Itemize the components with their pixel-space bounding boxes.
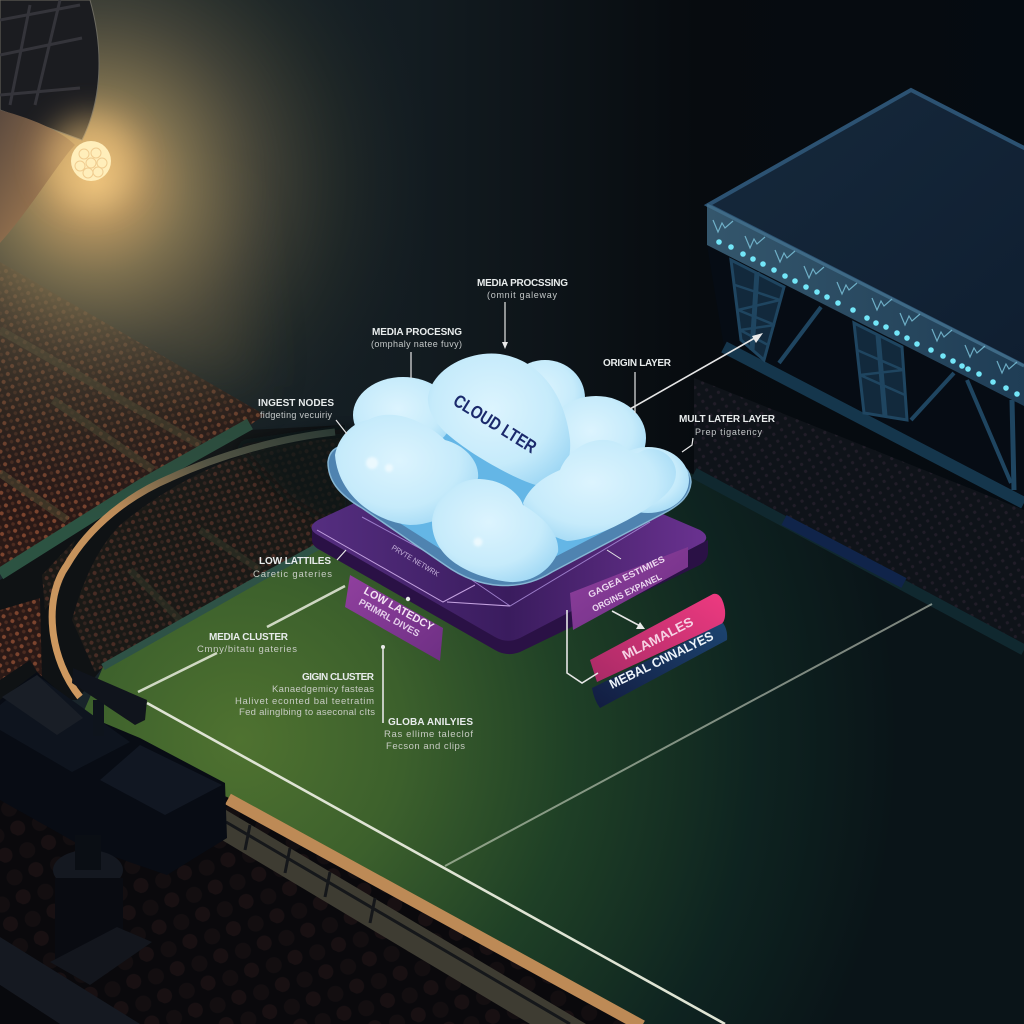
platform label: PRVTE NETWRK [390,543,441,579]
sign: platform right: GAGEA ESTIMIES [586,554,666,600]
label: media processing left: MEDIA PROCESNG [372,327,462,338]
broadcast camera [0,668,227,1024]
football pitch [80,406,1024,1024]
fence [222,810,586,1024]
label: origin cluster: Halivet econted bal teetratim [235,696,374,707]
sign: platform right: ORGINS EXPANEL [590,571,664,614]
label: origin layer: ORIGIN LAYER [603,358,672,369]
label: global analytics: Ras ellime taleclof [384,729,473,740]
label: media processing top: (omnit galeway [487,290,558,300]
label: media processing left: (omphaly natee fuvy) [371,339,462,349]
sign: low latency [345,575,443,661]
label: media cluster: MEDIA CLUSTER [209,632,289,643]
label: origin cluster: Fed alinglbing to aseconal cIts [239,707,375,718]
label: low lattiles: Caretic gateries [253,569,332,580]
truss glyphs [713,220,1017,373]
large puff with label: CLOUD LTER [450,390,540,457]
label: global analytics: Fecson and clips [386,741,465,752]
label: global analytics [384,717,473,752]
label: media cluster: Cmny/bitatu gateries [197,644,297,655]
label: ingest nodes [258,398,334,420]
connectors and arrows [336,302,760,723]
label: media processing left [371,327,462,349]
bottom stand [0,790,642,1024]
label: origin cluster: Kanaedgemicy fasteas [272,684,374,695]
floodlight glow [0,0,440,530]
cloud puffs [353,377,453,453]
right barrier [694,473,1024,650]
label: mult layer: MULT LATER LAYER [679,414,776,425]
sign: platform right [570,547,688,630]
label: low lattiles: LOW LATTILES [259,556,331,567]
sign: low latency: PRIMRL DIVES [357,597,421,640]
label: ingest nodes: INGEST NODES [258,398,334,409]
upper stand barrier [0,424,250,574]
stadium canopy [707,90,1024,503]
label: ingest nodes: fidgeting vecuiriy [260,410,332,420]
label: media processing top [477,278,568,300]
ribbon: analytics: MLAMALES [620,614,696,663]
label: low lattiles [253,556,332,580]
label: media processing top: MEDIA PROCSSING [477,278,568,289]
canopy lights [716,239,1020,397]
label: origin cluster: GIGIN CLUSTER [302,672,375,683]
label: mult layer [679,414,776,437]
canopy truss [724,260,1024,503]
label: mult layer: Prep tigatency [695,427,762,437]
left crowd stands [0,262,350,700]
orange rail [228,799,642,1024]
pitch barrier [103,540,330,667]
sign: low latency: LOW LATEDCY [362,585,436,634]
floodlight [0,0,134,243]
cloud layer [328,353,691,586]
right crowd stands [694,378,1024,650]
label: media cluster [197,632,297,655]
label: global analytics: GLOBA ANILYIES [388,717,473,728]
ribbon: analytics [590,594,727,708]
pitch markings [138,586,932,1024]
arrowheads [381,333,763,649]
label: origin cluster [235,672,375,718]
large puff with label [428,353,570,486]
curved rail [52,432,335,697]
platform: purple base [311,440,708,654]
cloud tray [328,430,691,586]
ribbon: analytics: MEBAL CNNALYES [607,628,716,692]
